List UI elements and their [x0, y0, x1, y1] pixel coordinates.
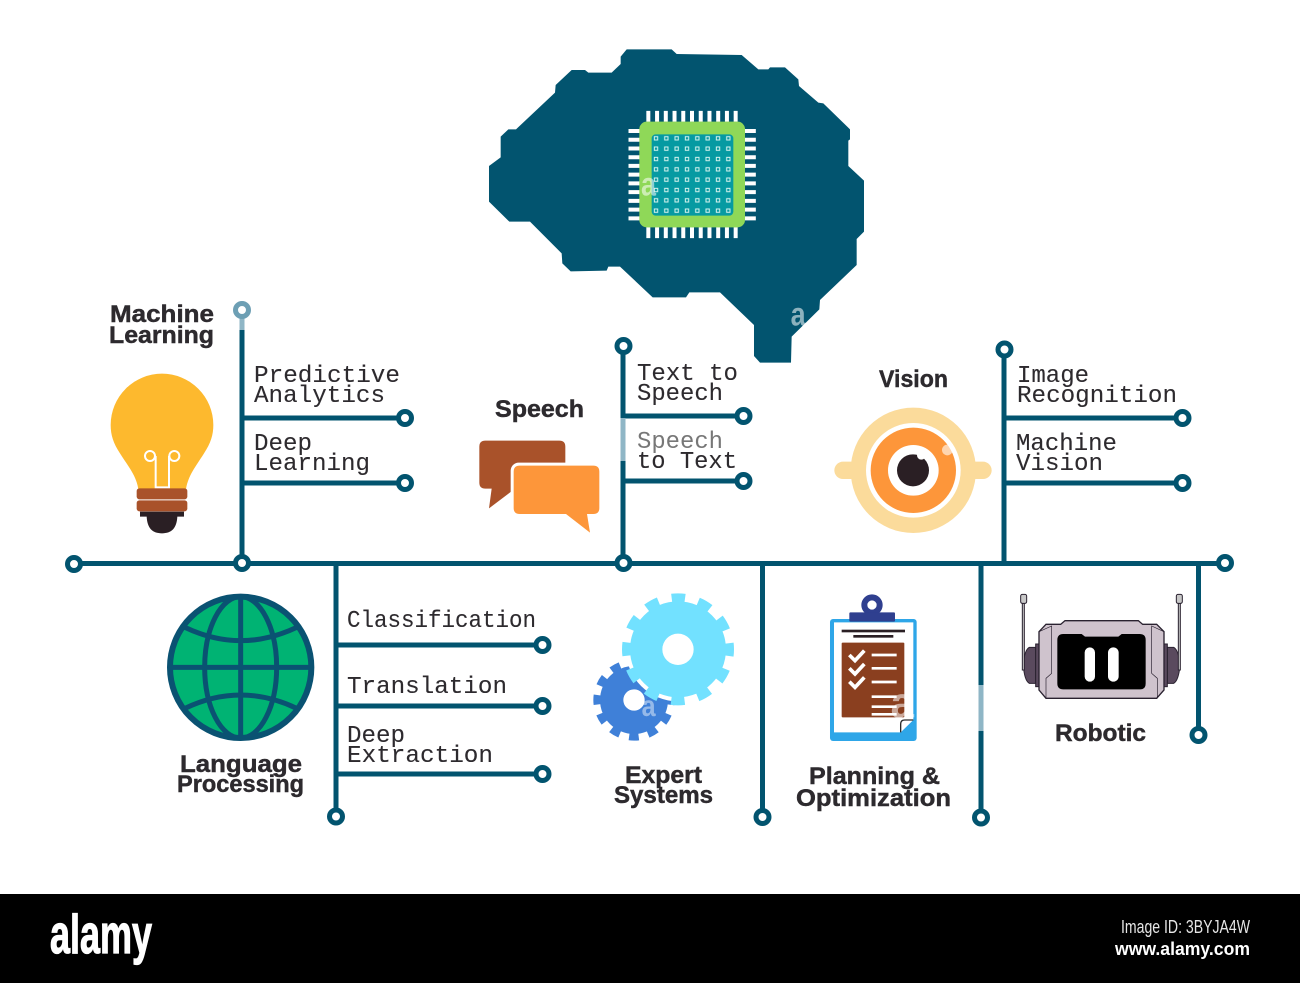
heading: expert systems: Expert — [625, 762, 702, 789]
label: predictive analytics: Analytics — [254, 383, 385, 410]
heading: expert systems: Systems — [614, 782, 713, 809]
connector: robotic line — [1192, 563, 1205, 742]
label: deep learning — [254, 431, 370, 478]
panel: robotic — [1021, 563, 1205, 747]
heading: expert systems — [614, 762, 713, 809]
label: deep learning: Learning — [254, 451, 370, 478]
label: speech to text — [637, 429, 737, 476]
connector: speech tree — [617, 340, 750, 570]
brain silhouette — [489, 49, 864, 363]
label: image recognition: Recognition — [1017, 383, 1177, 410]
label: machine vision: Vision — [1016, 451, 1103, 478]
icon: speech bubbles — [479, 441, 602, 533]
icon: brain with microchip — [489, 49, 864, 363]
label: machine vision: Machine — [1016, 431, 1117, 458]
label: deep learning: Deep — [254, 431, 312, 458]
label: machine vision — [1016, 431, 1117, 478]
label: deep extraction: Extraction — [347, 743, 493, 770]
label: predictive analytics — [254, 363, 400, 410]
footer url: www.alamy.com — [1114, 939, 1250, 959]
panel: speech — [479, 340, 750, 570]
main horizontal connector — [68, 556, 1232, 570]
heading: planning and optimization — [796, 763, 951, 812]
connector: vision tree — [998, 343, 1189, 563]
panel: machine learning — [109, 301, 412, 570]
label: image recognition — [1017, 363, 1177, 410]
watermark letter on brain: a — [791, 297, 806, 334]
panel: expert systems — [597, 563, 769, 824]
heading: language processing — [177, 751, 304, 798]
heading: vision: Vision — [879, 366, 948, 393]
heading: planning and optimization: Planning & — [809, 763, 940, 790]
connector: planning line — [974, 563, 988, 824]
label: classification: Classification — [347, 608, 536, 635]
heading: language processing: Language — [180, 751, 302, 778]
icon: eye — [834, 408, 992, 533]
heading: robotic: Robotic — [1055, 720, 1146, 747]
icon: light bulb — [111, 374, 213, 533]
icon: robot — [1021, 594, 1182, 698]
label: speech to text: to Text — [637, 449, 737, 476]
panel: language processing — [170, 563, 549, 823]
label: text to speech: Speech — [637, 381, 723, 408]
label: text to speech — [637, 361, 738, 408]
label: image recognition: Image — [1017, 363, 1089, 390]
microchip — [634, 116, 750, 233]
label: speech to text: Speech — [637, 429, 723, 456]
footer bar — [0, 894, 1300, 983]
panel: planning and optimization — [796, 563, 988, 824]
heading: language processing: Processing — [177, 771, 304, 798]
icon: clipboard: a — [891, 679, 915, 727]
heading: machine learning — [109, 301, 214, 349]
heading: machine learning: Machine — [110, 301, 214, 328]
connector: machine learning tree — [236, 304, 412, 570]
label: deep extraction — [347, 723, 493, 770]
label: deep extraction: Deep — [347, 723, 405, 750]
label: predictive analytics: Predictive — [254, 363, 400, 390]
footer image id: Image ID: 3BYJA4W — [1121, 917, 1250, 937]
icon: gears: a — [642, 690, 656, 723]
label: translation: Translation — [347, 674, 507, 701]
icon: clipboard — [830, 597, 917, 741]
heading: machine learning: Learning — [109, 322, 214, 349]
heading: speech: Speech — [495, 396, 584, 423]
connector: language tree — [330, 563, 549, 823]
label: text to speech: Text to — [637, 361, 738, 388]
footer logo: alamy — [50, 903, 152, 965]
heading: planning and optimization: Optimization — [796, 785, 951, 812]
connector: expert systems line — [756, 563, 769, 824]
icon: gears — [597, 597, 730, 737]
icon: globe — [170, 597, 311, 738]
watermark letter on chip: a — [641, 166, 656, 203]
panel: vision — [834, 343, 1189, 563]
